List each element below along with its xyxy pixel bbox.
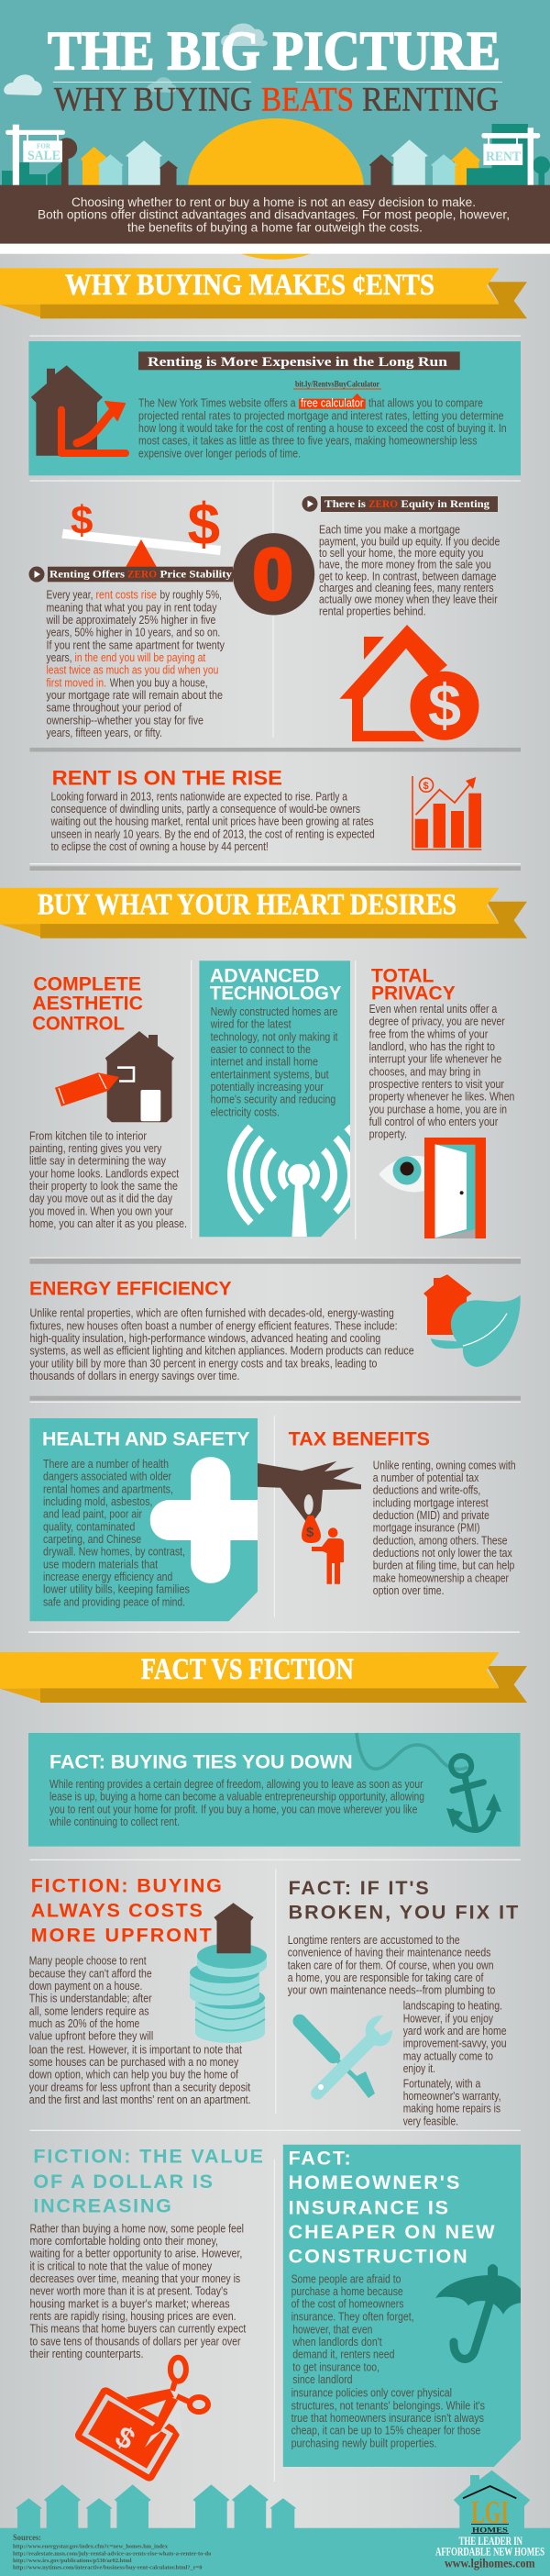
- heading: renting is more expensive: [138, 351, 460, 370]
- intro text band: [0, 185, 550, 244]
- icon: big zero: [233, 533, 314, 615]
- text block: health and safety: rental homes and apartments,: [43, 1482, 173, 1495]
- panel: complete aesthetic control: [29, 972, 187, 1230]
- text block: value of a dollar: it is critical to note that the value of money: [29, 2260, 213, 2272]
- text block: maintenance continued: improvement-savvy, you: [403, 2037, 507, 2050]
- text block: insurance: purchase a home because: [292, 2285, 403, 2298]
- text block: buying ties you down: While renting provides a certain degree of freedom, allowing you to leave as soon as your: [50, 1778, 424, 1791]
- text block: value of a dollar: their renting counterparts.: [29, 2348, 143, 2360]
- panel: buying ties you down: [28, 1733, 521, 1847]
- text block: price stability: ownership--whether you stay for five: [46, 714, 204, 727]
- text block: fiction upfront costs: loan the rest. However, it is important to note that: [29, 2043, 242, 2056]
- icon: price balance scale: $: [187, 491, 220, 557]
- text block: price stability: [46, 589, 226, 739]
- text block: insurance: insurance policies only cover physical: [292, 2387, 452, 2400]
- text block: price stability: Every year,: [46, 589, 93, 602]
- text block: value of a dollar: rents are rapidly rising, housing prices are even.: [29, 2310, 236, 2323]
- heading: value of a dollar: OF A DOLLAR IS: [33, 2171, 213, 2193]
- text block: total privacy: [369, 1003, 514, 1141]
- text block: sources: http://realestate.msn.com/july-rental-advice-as-rents-rise-whats-a-renter-to-do: [13, 2550, 212, 2557]
- text block: fiction upfront costs: down option, which can help you buy the home of: [29, 2069, 238, 2082]
- panel: renting is more expensive: [28, 341, 521, 475]
- text block: tax benefits: burden at filing time, but can help: [373, 1560, 514, 1572]
- heading: complete aesthetic control: AESTHETIC: [32, 993, 143, 1015]
- icon: wrench and screwdriver: [300, 2015, 392, 2098]
- text block: aesthetic control: little say in determining the way: [29, 1155, 167, 1168]
- banner: fact vs fiction: [0, 1652, 527, 1703]
- text block: insurance: structures, not tenants' belongings. While it's: [292, 2399, 485, 2412]
- icon: rent sign: RENT: [486, 150, 521, 164]
- heading: renting is more expensive: Renting is More Expensive in the Long Run: [148, 355, 448, 370]
- text block: advanced technology: electricity costs.: [211, 1105, 280, 1118]
- icon: left skyline: [2, 138, 178, 185]
- icon: for sale sign: [6, 125, 65, 185]
- text block: health and safety: use modern materials that: [43, 1558, 159, 1571]
- icon: hand dropping money bag: $: [306, 1525, 314, 1540]
- text block: health and safety: including mold, asbestos,: [43, 1495, 152, 1508]
- text block: rent rise: Looking forward in 2013, rents nationwide are expected to rise. Partly a: [51, 790, 347, 803]
- heading: zero price stability: Price Stability: [160, 567, 232, 580]
- icon: eye and door: [379, 1138, 486, 1238]
- footer: skyline, sources and logo: [0, 2471, 550, 2576]
- text block: aesthetic control: day you move out as it did the day: [29, 1193, 173, 1205]
- text block: price stability: least twice as much as you did when you: [46, 664, 218, 677]
- intro text band: the benefits of buying a home far outweigh the costs.: [127, 220, 423, 234]
- icon: house and leaf: [424, 1274, 521, 1367]
- heading: total privacy: TOTAL: [371, 965, 434, 987]
- text block: sources: http://www.irs.gov/publications/p530/ar02.html: [13, 2558, 132, 2564]
- text block: price stability: in the end you will be paying at: [75, 651, 206, 664]
- text block: zero equity: get to keep. In contrast, between damage: [319, 570, 497, 583]
- text block: insurance: since landlord: [292, 2373, 353, 2386]
- text block: maintenance intro: your own maintenance needs--from plumbing to: [288, 1984, 495, 1997]
- text block: fiction upfront costs: This is understandable; after: [29, 1993, 152, 2005]
- text block: advanced technology: home's security and reducing: [211, 1094, 336, 1106]
- text block: health and safety: and lead paint, poor air: [43, 1508, 142, 1521]
- heading: buying ties you down: FACT: BUYING TIES YOU DOWN: [50, 1751, 353, 1773]
- text block: energy efficiency: [29, 1307, 414, 1382]
- text block: zero equity: rental properties behind.: [319, 605, 426, 617]
- text block: aesthetic control: your home looks. Landlords expect: [29, 1167, 180, 1180]
- logo: LGI Homes: HOMES: [472, 2525, 508, 2534]
- text block: price stability: your mortgage rate will remain about the: [46, 689, 223, 702]
- text block: maintenance continued: However, if you enjoy: [403, 2012, 494, 2025]
- icon: umbrella: [435, 2264, 524, 2359]
- text block: sources: http://www.energystar.gov/index.cfm?c=new_homes.hm_index: [13, 2544, 169, 2550]
- panel: health and safety: [29, 1418, 279, 1621]
- text block: price stability: years, fifteen years, or fifty.: [46, 727, 162, 739]
- text block: total privacy: chooses, and may bring in: [369, 1065, 480, 1078]
- text block: sources: Sources:: [13, 2533, 41, 2542]
- heading: homeowner's insurance: CONSTRUCTION: [289, 2246, 468, 2268]
- subtitle: RENTING: [362, 82, 499, 119]
- text block: health and safety: dangers associated with older: [43, 1471, 171, 1483]
- panel: fiction value of a dollar: [29, 2146, 263, 2479]
- text block: buying ties you down: [49, 1778, 424, 1828]
- chart icon: rising bars: $: [424, 781, 429, 792]
- text block: rent rise: to eclipse the cost of owning a house by 44 percent!: [51, 840, 269, 853]
- heading: health and safety: HEALTH AND SAFETY: [42, 1428, 249, 1450]
- panel: energy efficiency: [29, 1274, 521, 1382]
- intro text band: Both options offer distinct advantages and disadvantages. For most people, however,: [38, 208, 510, 222]
- text block: health and safety: safe and providing peace of mind.: [43, 1595, 185, 1608]
- text block: total privacy: property whenever he likes. When: [369, 1091, 514, 1104]
- icon: wifi tower: [231, 1127, 367, 1237]
- heading: homeowner's insurance: HOMEOWNER'S: [289, 2171, 459, 2193]
- text block: price stability: same throughout your period of: [46, 702, 182, 715]
- text block: maintenance continued: making home repairs is: [403, 2103, 500, 2115]
- text block: insurance: purchasing newly built properties.: [292, 2437, 436, 2449]
- text block: health and safety: drywall. New homes, by contrast,: [43, 1546, 185, 1559]
- text block: tax benefits: mortgage insurance (PMI): [373, 1522, 480, 1535]
- heading: value of a dollar: INCREASING: [33, 2195, 171, 2217]
- text block: price stability: When you buy a house,: [110, 676, 208, 689]
- icon: scissors cutting dollar bill: [77, 2358, 208, 2479]
- text block: health and safety: [43, 1458, 190, 1608]
- icon: house and crayon: [55, 1031, 174, 1122]
- text block: energy efficiency: high-quality insulation, high-performance windows, advanced heating and cooling: [29, 1332, 380, 1345]
- text block: tax benefits: including mortgage interest: [373, 1496, 489, 1509]
- text block: advanced technology: entertainment systems, but: [211, 1068, 329, 1081]
- text block: tax benefits: deduction, among others. These: [373, 1534, 507, 1547]
- heading: homeowner's insurance: FACT:: [289, 2147, 351, 2169]
- icon: big zero: 0: [253, 534, 292, 615]
- text block: maintenance continued: may actually come to: [403, 2049, 493, 2062]
- text block: value of a dollar: [29, 2222, 247, 2360]
- text block: calculator description: [138, 397, 507, 460]
- text block: price stability: first moved in.: [46, 676, 106, 689]
- text block: maintenance intro: Longtime renters are accustomed to the: [288, 1934, 460, 1947]
- text block: rent rise: waiting out the housing market, rental unit prices have been growing at rates: [50, 816, 374, 828]
- heading: homeowner's insurance: INSURANCE IS: [289, 2196, 448, 2218]
- text block: maintenance continued: Fortunately, with a: [403, 2077, 480, 2090]
- intro text band: Choosing whether to rent or buy a home is not an easy decision to make.: [72, 195, 476, 209]
- text block: buying ties you down: while continuing to collect rent.: [49, 1815, 180, 1828]
- icon: clouds: [4, 23, 268, 95]
- icon: price balance scale: $: [71, 498, 93, 543]
- text block: tax benefits: a number of potential tax: [373, 1471, 479, 1484]
- subtitle: WHY BUYING: [54, 82, 252, 119]
- text block: aesthetic control: home, you can alter it as you please.: [29, 1217, 187, 1230]
- text block: tax benefits: make homeownership a cheaper: [373, 1571, 509, 1584]
- heading: energy efficiency: ENERGY EFFICIENCY: [29, 1278, 232, 1300]
- text block: tax benefits: deductions and write-offs,: [373, 1484, 480, 1497]
- text block: calculator description: free calculator: [301, 397, 363, 410]
- icon: house with dollar coin: [339, 625, 478, 741]
- heading: total privacy: [371, 965, 456, 1004]
- heading: advanced technology: [210, 965, 341, 1004]
- text block: maintenance continued: landscaping to heating.: [403, 2000, 502, 2013]
- text block: rent rise: [50, 790, 375, 853]
- text block: insurance: to get insurance too,: [292, 2360, 380, 2373]
- text block: energy efficiency: your utility bill by more than 30 percent in energy costs and tax breaks, leading to: [29, 1357, 377, 1370]
- heading: fiction buying always costs more upfront: ALWAYS COSTS: [31, 1899, 203, 1921]
- text block: value of a dollar: never worth more than it is at present. Today's: [29, 2285, 227, 2298]
- subtitle: [54, 82, 499, 119]
- icon: scissors cutting dollar bill: $: [110, 2419, 141, 2456]
- text block: tax benefits: deduction (MID) and private: [373, 1509, 490, 1522]
- text block: insurance: Some people are afraid to: [292, 2272, 401, 2285]
- text block: price stability: If you rent the same apartment for twenty: [46, 638, 226, 651]
- text block: energy efficiency: fixtures, new houses often boast a number of energy efficient features. These include:: [29, 1319, 398, 1332]
- logo: LGI Homes: [454, 2471, 530, 2534]
- text block: energy efficiency: systems, as well as efficient lighting and kitchen appliances. Modern products can reduce: [29, 1345, 414, 1358]
- icon: rent sign: [481, 128, 540, 185]
- heading: advanced technology: TECHNOLOGY: [210, 982, 341, 1004]
- text block: total privacy: degree of privacy, you are never: [369, 1016, 505, 1028]
- text block: insurance: [292, 2272, 485, 2449]
- heading: zero price stability: [29, 567, 233, 582]
- text block: maintenance continued: yard work and are home: [403, 2025, 507, 2037]
- text block: price stability: years, 50% higher in 10 years, and so on.: [46, 627, 220, 639]
- text block: company tagline: www.lgihomes.com: [445, 2558, 535, 2571]
- text block: sources: http://www.nytimes.com/interactive/business/buy-rent-calculator.html?_r=0: [13, 2565, 203, 2571]
- text block: advanced technology: easier to connect to the: [211, 1043, 311, 1056]
- heading: complete aesthetic control: COMPLETE: [33, 972, 141, 994]
- icon: house with dollar coin: $: [428, 672, 461, 738]
- text block: fiction upfront costs: and the first and last months' rent on an apartment.: [29, 2093, 251, 2106]
- text block: health and safety: quality, contaminated: [43, 1520, 135, 1533]
- text block: zero equity: have, the more money from the sale you: [319, 559, 491, 572]
- text block: fiction upfront costs: much as 20% of the home: [29, 2017, 139, 2030]
- text block: maintenance intro: taken care of for them. Of course, when you own: [288, 1959, 493, 1971]
- text block: rent rise: unseen in nearly 10 years. By the end of 2013, the cost of renting is expected: [51, 827, 375, 840]
- text block: advanced technology: wired for the latest: [210, 1018, 292, 1031]
- banner: fact vs fiction: FACT VS FICTION: [141, 1653, 354, 1686]
- heading: tax benefits: TAX BENEFITS: [289, 1428, 430, 1450]
- text block: zero equity: payment, you build up equity. If you decide: [319, 535, 500, 548]
- text block: zero equity: to sell your home, the more equity you: [319, 547, 483, 560]
- text block: maintenance continued: [403, 2000, 507, 2127]
- text block: price stability: years,: [46, 651, 72, 664]
- text block: zero equity: charges and cleaning fees, many renters: [319, 582, 493, 594]
- text block: buying ties you down: you to rent out your home for profit. If you buy a home, you can move wherever you like: [50, 1803, 417, 1815]
- title: THE BIG PICTURE: [48, 20, 500, 81]
- heading: zero price stability: ZERO: [127, 567, 157, 580]
- icon: sun: [188, 118, 364, 260]
- subtitle: BEATS: [261, 82, 354, 119]
- heading: rent is on the rise: RENT IS ON THE RISE: [52, 767, 282, 790]
- text block: insurance: cheap, it can be up to 15% cheaper for those: [292, 2425, 480, 2437]
- text block: price stability: rent costs rise: [95, 589, 157, 602]
- callout: calculator link: [293, 379, 381, 409]
- text block: maintenance intro: [288, 1934, 495, 1997]
- text block: tax benefits: Unlike renting, owning comes with: [373, 1459, 516, 1471]
- heading: homeowner's insurance: CHEAPER ON NEW: [289, 2221, 495, 2243]
- text block: advanced technology: potentially increasing your: [211, 1081, 324, 1094]
- text block: calculator description: expensive over longer periods of time.: [138, 447, 301, 460]
- banner: buy what your heart desires: BUY WHAT YOUR HEART DESIRES: [38, 889, 456, 922]
- text block: value of a dollar: more comfortable holding onto their money,: [29, 2235, 218, 2248]
- icon: house on stack of coins: [190, 1903, 267, 2043]
- heading: zero price stability: Renting Offers: [50, 567, 125, 580]
- text block: total privacy: property.: [369, 1128, 407, 1141]
- text block: tax benefits: [373, 1459, 516, 1597]
- text block: maintenance intro: a home, you are responsible for taking care of: [288, 1971, 484, 1984]
- text block: calculator description: The New York Times website offers a: [138, 397, 296, 410]
- text block: insurance: however, that even: [292, 2323, 372, 2336]
- text block: maintenance intro: convenience of having their maintenance needs: [288, 1947, 490, 1960]
- text block: total privacy: landlord, who has the right to: [369, 1040, 495, 1053]
- text block: health and safety: increase energy efficiency and: [43, 1571, 172, 1583]
- text block: calculator description: that allows you to compare: [368, 397, 483, 410]
- text block: calculator description: most cases, it takes as little as three to five years, making homeownership less: [138, 435, 477, 448]
- icon: for sale sign: FOR: [37, 141, 51, 150]
- callout: calculator link: bit.ly/RentvsBuyCalculator: [295, 379, 380, 388]
- text block: price stability: by roughly 5%,: [160, 589, 222, 602]
- text block: fiction upfront costs: all, some lenders require as: [29, 2004, 149, 2017]
- icon: house with rising arrow: [31, 365, 126, 456]
- text block: fiction upfront costs: Many people choose to rent: [29, 1955, 147, 1968]
- heading: fact if it's broken you fix it: FACT: IF IT'S: [289, 1877, 429, 1899]
- heading: fact if it's broken you fix it: BROKEN, YOU FIX IT: [289, 1902, 518, 1924]
- panel: tax benefits: [258, 1428, 516, 1597]
- text block: aesthetic control: their property to look the same the: [29, 1180, 178, 1193]
- heading: complete aesthetic control: [32, 972, 143, 1034]
- text block: total privacy: Even when rental units offer a: [369, 1003, 497, 1016]
- text block: aesthetic control: From kitchen tile to interior: [29, 1129, 147, 1142]
- text block: fiction upfront costs: because they can't afford the: [29, 1967, 152, 1980]
- heading: fiction buying always costs more upfront: [31, 1874, 222, 1947]
- icon: footer houses skyline: [16, 2484, 296, 2528]
- text block: zero equity: [319, 524, 500, 617]
- heading: value of a dollar: FICTION: THE VALUE: [33, 2146, 263, 2168]
- panel: total privacy: [369, 965, 514, 1238]
- text block: price stability: will be approximately 25% higher in five: [46, 614, 215, 627]
- text block: aesthetic control: [29, 1129, 187, 1230]
- heading: fiction buying always costs more upfront: FICTION: BUYING: [31, 1874, 222, 1896]
- banner: buy what your heart desires: [0, 888, 527, 938]
- heading: homeowner's insurance: [289, 2147, 495, 2268]
- text block: value of a dollar: waiting for a better opportunity to arise. However,: [29, 2248, 242, 2260]
- heading: fact if it's broken you fix it: [289, 1877, 518, 1924]
- text block: maintenance continued: enjoy it.: [403, 2062, 435, 2075]
- heading: zero equity: Equity in Renting: [401, 497, 490, 510]
- panel: rent is on the rise: [50, 767, 481, 853]
- text block: advanced technology: internet and install home: [211, 1056, 318, 1069]
- text block: price stability: meaning that what you pay in rent today: [46, 601, 217, 614]
- text block: rent rise: consequence of dwindling units, partly a consequence of would-be owners: [51, 803, 360, 816]
- text block: health and safety: There are a number of health: [43, 1458, 169, 1471]
- text block: advanced technology: [210, 1005, 338, 1118]
- text block: zero equity: Each time you make a mortgage: [319, 524, 460, 537]
- heading: value of a dollar: [33, 2146, 263, 2217]
- text block: tax benefits: deductions not only lower the tax: [373, 1547, 512, 1560]
- text block: insurance: demand it, renters need: [292, 2348, 394, 2361]
- text block: energy efficiency: thousands of dollars in energy savings over time.: [29, 1370, 239, 1382]
- text block: value of a dollar: to save tens of thousands of dollars per year over: [29, 2335, 240, 2348]
- heading: fiction buying always costs more upfront: MORE UPFRONT: [31, 1925, 212, 1947]
- icon: right skyline: [369, 124, 550, 185]
- text block: fiction upfront costs: [29, 1955, 251, 2106]
- text block: insurance: insurance. They often forget,: [292, 2310, 414, 2323]
- heading: zero equity: ZERO: [368, 497, 398, 510]
- heading: total privacy: PRIVACY: [371, 982, 456, 1004]
- panel: advanced technology: [199, 960, 367, 1237]
- text block: maintenance continued: homeowner's warranty,: [403, 2090, 500, 2103]
- text block: insurance: true that homeowners insurance isn't always: [292, 2412, 484, 2425]
- text block: advanced technology: technology, not only making it: [211, 1030, 338, 1043]
- heading: complete aesthetic control: CONTROL: [32, 1012, 125, 1034]
- text block: health and safety: carpeting, and Chinese: [43, 1533, 141, 1546]
- banner: why buying makes cents: [0, 268, 527, 318]
- text block: insurance: of the cost of homeowners: [292, 2298, 403, 2311]
- icon: anchor and rope: [357, 1733, 501, 1830]
- chart icon: rising bars: [412, 776, 481, 849]
- text block: tax benefits: option over time.: [373, 1584, 444, 1597]
- panel: fiction buying costs more upfront: [29, 1874, 267, 2106]
- text block: value of a dollar: This means that home buyers can currently expect: [29, 2323, 247, 2336]
- text block: advanced technology: Newly constructed homes are: [211, 1005, 337, 1018]
- text block: total privacy: free from the whims of your: [369, 1027, 488, 1040]
- text block: fiction upfront costs: your dreams for less upfront than a security deposit: [29, 2081, 251, 2093]
- text block: total privacy: prospective renters to visit your: [369, 1078, 504, 1091]
- text block: value of a dollar: housing market is a buyer's market; whereas: [29, 2297, 230, 2310]
- heading: zero equity: [302, 496, 498, 512]
- heading: advanced technology: ADVANCED: [210, 965, 319, 987]
- panel: fact homeowner's insurance: [283, 2145, 524, 2467]
- banner: why buying makes cents: WHY BUYING MAKES ¢ENTS: [65, 269, 434, 302]
- icon: for sale sign: SALE: [28, 149, 60, 163]
- text block: total privacy: you purchase a home, you are in: [369, 1103, 507, 1116]
- header: title and skyline: [0, 0, 550, 260]
- text block: fiction upfront costs: value upfront before they will: [29, 2030, 153, 2043]
- text block: aesthetic control: painting, renting gives you very: [29, 1142, 162, 1155]
- icon: price balance scale: [61, 491, 221, 567]
- panel: fact if it's broken: [288, 1877, 518, 2127]
- text block: energy efficiency: Unlike rental properties, which are often furnished with decades-old, energy-wasting: [29, 1307, 394, 1320]
- icon: hand dropping money bag: [258, 1461, 361, 1584]
- heading: zero equity: There is: [324, 497, 366, 510]
- text block: zero equity: actually owe money when they leave their: [319, 594, 498, 606]
- text block: fiction upfront costs: down payment on a house.: [29, 1980, 142, 1993]
- text block: maintenance continued: very feasible.: [403, 2115, 458, 2127]
- icon: medical cross: [150, 1457, 258, 1583]
- text block: insurance: when landlords don't: [292, 2336, 382, 2348]
- text block: total privacy: full control of who enters your: [369, 1116, 498, 1128]
- text block: company tagline: [435, 2534, 544, 2571]
- text block: fiction upfront costs: some houses can be purchased with a no money: [29, 2056, 239, 2069]
- text block: total privacy: interrupt your life whenever he: [369, 1053, 501, 1066]
- text block: aesthetic control: you moved in. When you own your: [29, 1205, 173, 1217]
- text block: sources: [13, 2533, 212, 2571]
- text block: value of a dollar: decreases over time, meaning that your money is: [29, 2272, 240, 2285]
- text block: health and safety: lower utility bills, keeping families: [43, 1583, 190, 1596]
- text block: value of a dollar: Rather than buying a home now, some people feel: [29, 2222, 244, 2235]
- logo: LGI Homes: LGI: [471, 2494, 509, 2530]
- text block: buying ties you down: lease is up, buying a home can become a valuable entrepreneurship opportunity, allowing: [50, 1791, 424, 1804]
